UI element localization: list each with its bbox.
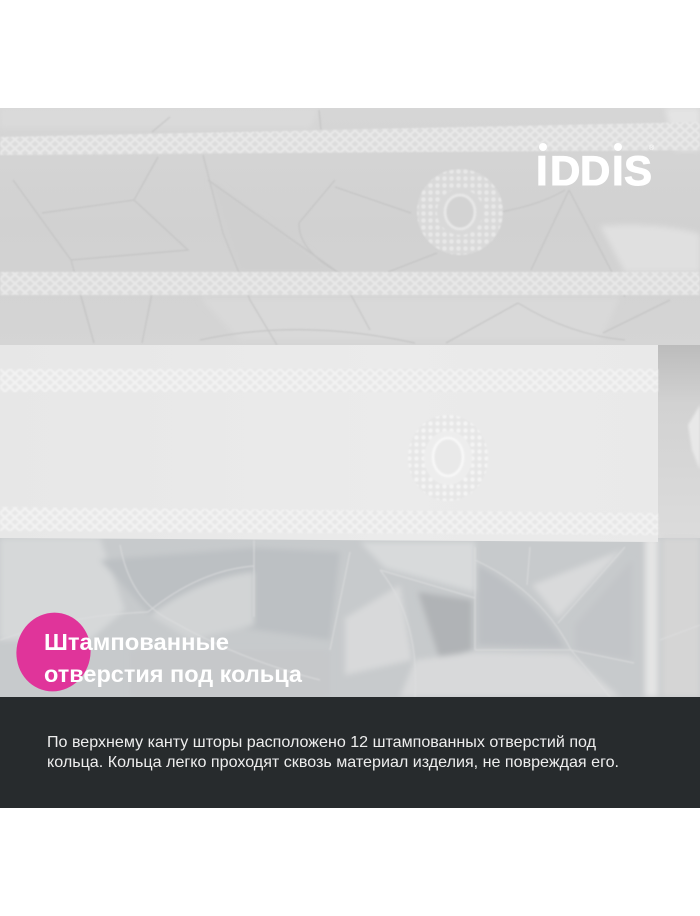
stamped ring hole, hem [408, 415, 488, 501]
photo: shower curtain fabric [0, 108, 700, 698]
infographic canvas [0, 108, 700, 808]
registered mark: ® [649, 144, 655, 152]
folded top hem panel [0, 345, 658, 542]
upper stitched seam [0, 122, 700, 155]
description text: По верхнему канту шторы расположено 12 штампованных отверстий под [47, 734, 597, 751]
stamped ring hole, upper [417, 169, 503, 255]
logo letter dots [539, 143, 622, 151]
heading: Штампованные [44, 629, 229, 655]
heading: отверстия под кольца [44, 661, 302, 687]
upper curtain fabric [0, 108, 700, 348]
lower curtain fabric [0, 538, 700, 698]
hem upper stitched seam [0, 369, 658, 392]
hem lower stitched seam [0, 508, 658, 532]
pink accent ellipse [16, 612, 91, 692]
description text: кольца. Кольца легко проходят сквозь материал изделия, не повреждая его. [47, 754, 619, 771]
heading [44, 629, 302, 687]
dark description band [0, 697, 700, 808]
right edge behind folded hem [658, 345, 700, 542]
logo: IDDIS: IDDIS [536, 147, 652, 194]
lower stitched seam [0, 272, 700, 295]
description text [47, 734, 619, 771]
